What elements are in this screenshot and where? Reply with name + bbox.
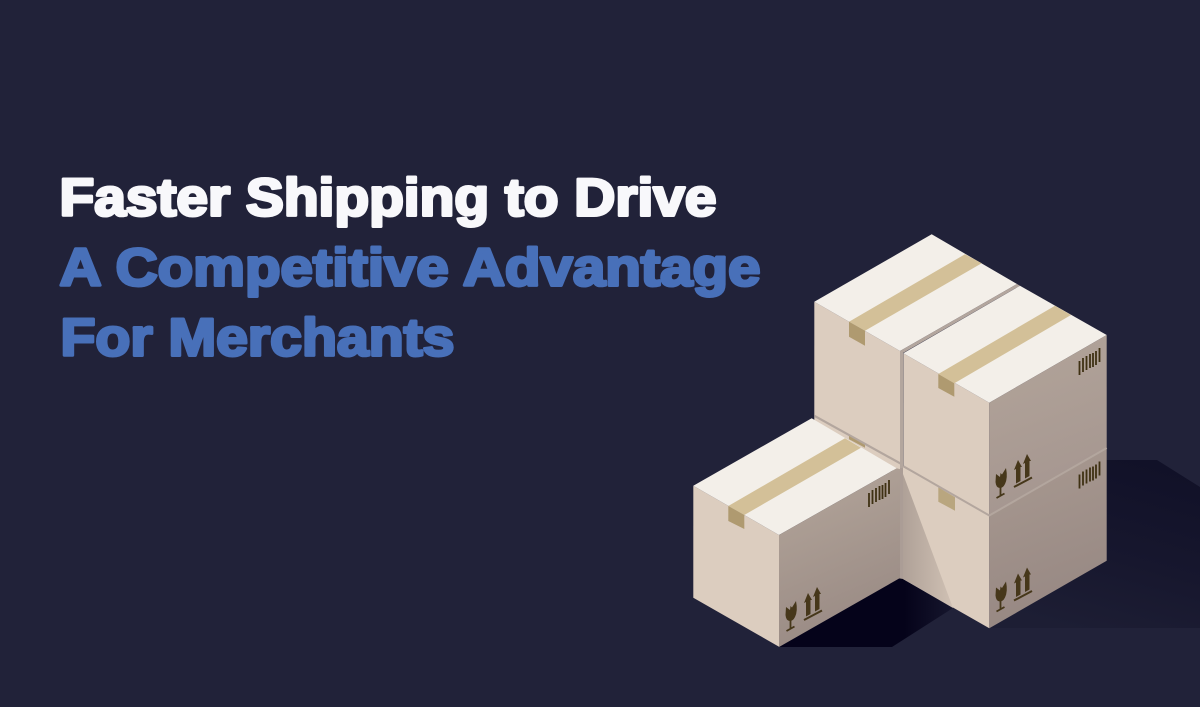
box A tape end [849, 436, 865, 448]
box: front left [693, 418, 903, 647]
front box barcode [869, 480, 889, 507]
lower box tape [938, 487, 955, 511]
box B tape side [938, 374, 954, 397]
box A top face [814, 234, 1017, 351]
front box left face [693, 486, 779, 647]
front box top face [693, 418, 897, 535]
box A tape top [849, 254, 982, 331]
title line 2: A Competitive Advantage [60, 238, 760, 298]
front box tape top [728, 438, 861, 515]
shadow: front box [779, 578, 953, 647]
box B top face [903, 286, 1107, 403]
box: upper right [900, 284, 1107, 516]
box seam [900, 284, 1020, 470]
front box right face [779, 468, 903, 647]
lower box right face [989, 448, 1107, 628]
title [60, 168, 760, 368]
box B fragile icon [996, 454, 1032, 498]
illustration: stacked boxes [693, 234, 1200, 647]
front box fragile icon [786, 587, 822, 631]
lower box cast shadow [897, 466, 953, 608]
title line 3: For Merchants [60, 308, 454, 368]
box B barcode [1080, 348, 1100, 375]
title line 1: Faster Shipping to Drive [60, 168, 716, 228]
box B bottom seam [903, 448, 1107, 516]
box B tape top [938, 306, 1071, 383]
box A tape side [849, 322, 865, 346]
lower box left face [903, 467, 989, 628]
lower box fragile icon [996, 568, 1032, 612]
front box tape side [728, 506, 744, 529]
shadow: right stack [989, 460, 1200, 628]
vertical seam lower [900, 468, 903, 578]
box A left face [814, 302, 900, 475]
box: upper left [814, 234, 1017, 475]
box B left face [903, 353, 989, 515]
box B right face [989, 335, 1107, 515]
lower box barcode [1080, 462, 1100, 488]
box: lower right [897, 448, 1107, 628]
box A bottom seam [814, 414, 900, 464]
